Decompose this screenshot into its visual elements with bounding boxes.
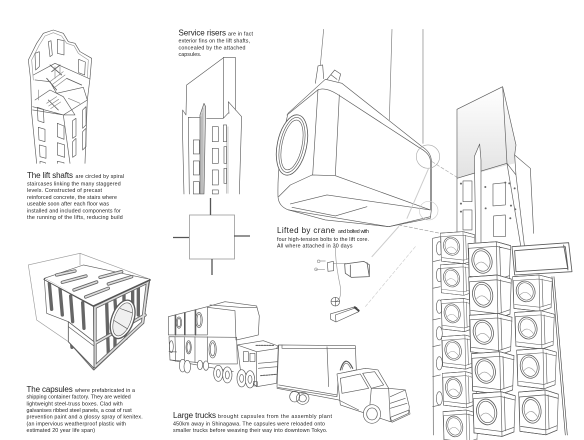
text: service risers: capsules. [178, 52, 202, 58]
far-left capsule column [433, 237, 442, 435]
illustration: large truck carrying capsules [168, 302, 278, 388]
text: large trucks: Large trucks [173, 411, 216, 420]
text: capsules: The capsules [26, 385, 73, 394]
text: capsules: galvanises ribbed steel panels, a coat of rust [26, 408, 132, 414]
text: lift shafts: reinforced concrete, the stairs where [27, 195, 117, 201]
connector circles and dashed leader lines [365, 145, 459, 307]
text: service risers: Service risers [178, 29, 226, 38]
illustration: exploded bolts and fixing parts [315, 247, 369, 322]
text: large trucks: 450km away in Shinagawa. The capsules were reloaded onto [173, 421, 325, 427]
text: service risers: concealed by the attached [178, 45, 246, 51]
left capsule column [440, 232, 478, 440]
text: service risers: exterior fins on the lift shafts, [178, 38, 250, 44]
illustration: delivery truck [277, 345, 410, 423]
text: lift shafts: the running of the lifts, reducing build [27, 215, 123, 221]
text: lift shafts: levels. Constructed of precast [27, 188, 103, 194]
text: lifted by crane [277, 226, 369, 250]
text: large trucks [173, 411, 333, 434]
text: lift shafts: are circled by spiral [76, 174, 124, 180]
text: lift shafts: installed and included components for [27, 208, 121, 214]
text: lifted by crane: All where attached in 30 days [277, 244, 353, 250]
text: large trucks: brought capsules from the assembly plant [218, 414, 333, 420]
text: lift shafts: useable soon after each floor was [27, 202, 109, 208]
text: lifted by crane: Lifted by crane [277, 226, 336, 235]
text: capsules: lightweight steel-truss boxes. Clad with [26, 401, 123, 407]
centre capsule column [468, 242, 515, 436]
plan diagram: core with four fins [173, 198, 250, 275]
text: lift shafts [27, 171, 124, 221]
text: capsules: (an impervious weatherproof plastic with [26, 421, 126, 427]
illustration: capsule steel-truss frame [28, 253, 150, 370]
text: capsules: prevention paint and a glossy spray of kenitex. [26, 415, 143, 421]
illustration: capsule lifted by crane [271, 29, 431, 227]
illustration: lift shaft with spiral stairs [28, 30, 92, 163]
text: lift shafts: The lift shafts [27, 171, 73, 180]
text: lift shafts: staircases linking the many staggered [27, 182, 121, 188]
text: capsules [26, 385, 143, 434]
text: lifted by crane: and bolted with [338, 229, 369, 235]
text: capsules: shipping container factory. They are welded [26, 395, 131, 401]
text: service risers [178, 29, 254, 58]
text: capsules: where prefabricated in a [75, 388, 135, 394]
capsule being attached [512, 243, 572, 275]
text: lifted by crane: four high-tension bolts to the lift core. [277, 237, 369, 243]
text: capsules: estimated 20 year life span) [26, 428, 95, 434]
text: large trucks: smaller trucks before weaving their way into downtown Tokyo. [173, 428, 328, 434]
right capsule column [513, 275, 567, 435]
text: service risers: are in fact [228, 32, 254, 38]
illustration: stacked capsule tower [433, 232, 572, 440]
illustration: service riser fins on shaft [182, 57, 242, 194]
illustration: lift core tower [457, 87, 534, 253]
